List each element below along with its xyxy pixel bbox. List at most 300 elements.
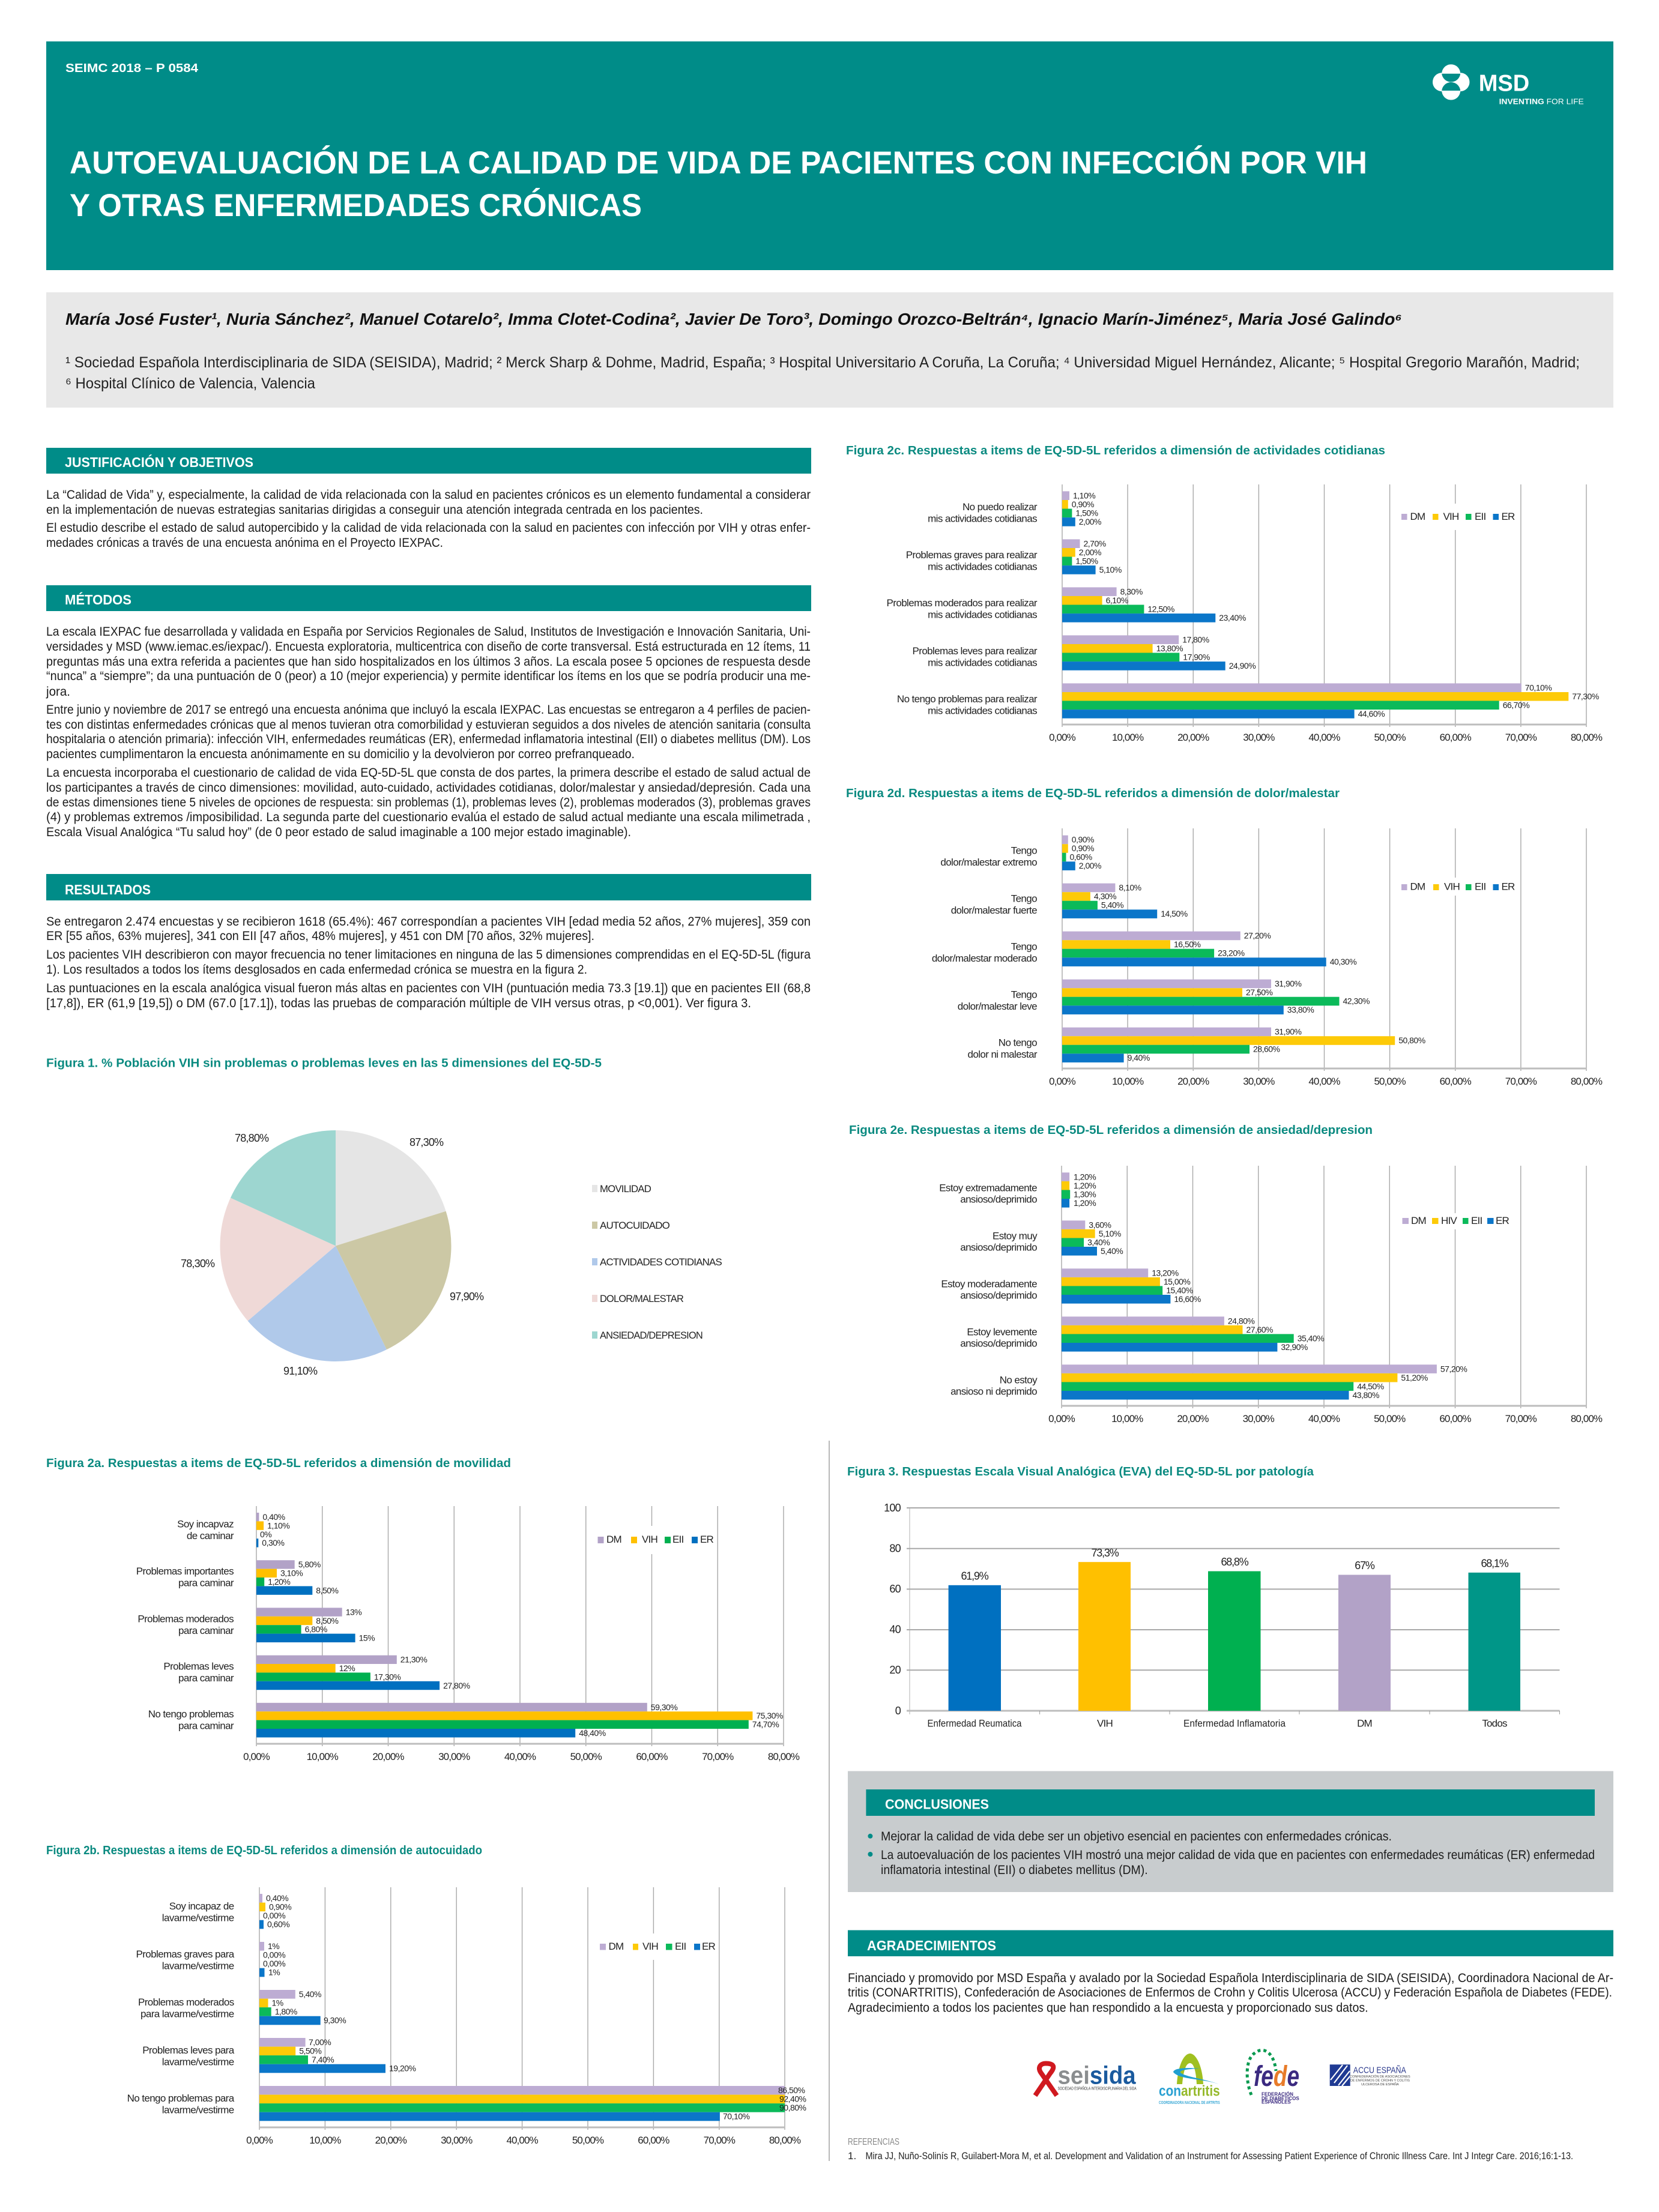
x axis labels: 30,00% (1243, 1413, 1275, 1424)
group: problemas moderados: 1% (271, 1998, 283, 2007)
text block: tritis (CONARTRITIS), Confederación de Asociaciones de Enfermos de Crohn y Colitis Ulcerosa (ACCU) y Federación Española de Diabetes (FEDE). (848, 1986, 1612, 2000)
text block: Entre junio y noviembre de 2017 se entregó una encuesta anónima que incluyó la escala IEXPAC. Las encuestas se entregaron a 4 perfiles de pacien- (46, 703, 811, 717)
group: moderadamente: ansioso/deprimido (960, 1290, 1037, 1301)
icon: seisida logo: seisida (1058, 2061, 1136, 2090)
x axis labels: 30,00% (1243, 1076, 1275, 1087)
text block: tes con distintas enfermedades crónicas que al menos tuvieran otra comorbilidad y estuvieran seguidos a dos niveles de atención sanitaria (consulta (46, 718, 811, 732)
legend: VIH (642, 1534, 657, 1545)
text block: El estudio describe el estado de salud autopercibido y la calidad de vida relacionada con la salud en pacientes con infección por VIH y otras enfer- (46, 521, 811, 535)
group: problemas importantes: para caminar (178, 1578, 234, 1589)
text block: (4) y problemas extremos /imposibilidad. La segunda parte del cuestionario evalúa el estado de salud actual mediante una escala milimetrada , (46, 810, 811, 824)
text block: Las puntuaciones en la escala analógica visual fueron más altas en pacientes con VIH (puntuación media 73.3 [19.1]) que en pacientes EII (68,8 (46, 981, 811, 995)
group: problemas moderados: 6,80% (305, 1624, 327, 1634)
legend: VIH (642, 1941, 658, 1952)
icon: ACCU logo: DE ENFERMOS DE CROHN Y COLITIS (1350, 2079, 1410, 2083)
x axis labels: 10,00% (307, 1751, 339, 1762)
group: problemas leves: 24,90% (1229, 661, 1256, 671)
group: no tengo problemas (148, 1702, 783, 1738)
group: problemas moderados (887, 586, 1246, 622)
x axis labels: 20,00% (375, 2135, 407, 2146)
x axis labels: 40,00% (1308, 1413, 1340, 1424)
x axis labels: 50,00% (1374, 732, 1406, 743)
group: problemas leves (913, 634, 1256, 671)
group: no puedo realizar: mis actividades cotidianas (928, 513, 1037, 524)
group: fuerte: 14,50% (1161, 909, 1188, 918)
group: problemas graves: 1% (268, 1968, 280, 1977)
figure 3: column chart EVA (847, 1465, 1560, 1729)
legend (594, 1526, 715, 1554)
group: no tengo: No tengo (999, 1037, 1037, 1049)
panel: conclusiones (848, 1771, 1613, 1892)
icon: ACCU logo: ACCU ESPAÑA (1353, 2065, 1406, 2075)
group: fuerte: 8,10% (1119, 883, 1141, 893)
group: moderado: 40,30% (1330, 957, 1356, 966)
x axis labels (1049, 732, 1603, 743)
y axis labels: 80 (889, 1543, 901, 1555)
figure title: Figura 2b. Respuestas a items de EQ-5D-5L referidos a dimensión de autocuidado (46, 1844, 482, 1857)
x axis labels: 30,00% (441, 2135, 473, 2146)
text block (46, 915, 811, 1010)
group: no tengo problemas: 77,30% (1572, 692, 1599, 701)
group: extremo (940, 835, 1101, 870)
heading: JUSTIFICACIÓN Y OBJETIVOS (65, 454, 253, 470)
legend: DM (1411, 1215, 1426, 1226)
group: problemas leves: 7,00% (309, 2037, 331, 2047)
main title: AUTOEVALUACIÓN DE LA CALIDAD DE VIDA DE PACIENTES CON INFECCIÓN POR VIH (70, 145, 1367, 181)
main title (70, 145, 1367, 223)
heading: RESULTADOS (65, 882, 151, 897)
text block: [17,8]), ER (61,9 [19,5]) o DM (67.0 [17.1]), todas las pruebas de comparación múltiple de VIH versus otras, p <0,001). Ver figura 3. (46, 996, 751, 1010)
figure 2c: bar chart actividades cotidianas (846, 444, 1603, 743)
x axis labels: 0,00% (246, 2135, 273, 2146)
group: no tengo problemas: No tengo problemas (148, 1708, 234, 1720)
group: problemas leves: mis actividades cotidianas (928, 657, 1037, 668)
group: problemas leves: para caminar (178, 1672, 234, 1684)
x axis labels: 40,00% (1308, 1076, 1340, 1087)
group: problemas moderados: 1,80% (275, 2007, 297, 2016)
legend: ER (1496, 1215, 1509, 1226)
columns (949, 1562, 1520, 1711)
group: problemas moderados: para caminar (178, 1625, 234, 1636)
text block: preguntas más una extra referida a pacientes que han sido hospitalizados en los últimos 3 años. La escala posee 5 opciones de respuesta desde (46, 655, 811, 669)
group: problemas moderados (138, 1989, 346, 2025)
group: no tengo problemas: para caminar (178, 1720, 234, 1731)
group: no tengo problemas: 70,10% (723, 2112, 750, 2121)
group: problemas leves: Problemas leves (163, 1661, 234, 1672)
group: no tengo: dolor ni malestar (968, 1049, 1038, 1060)
group: problemas leves: 13,80% (1156, 643, 1183, 653)
y axis labels: 60 (889, 1583, 901, 1595)
group: muy: 5,10% (1099, 1229, 1121, 1238)
figure title: Figura 2c. Respuestas a items de EQ-5D-5L referidos a dimensión de actividades cotidianas (846, 444, 1385, 457)
x axis labels: 80,00% (769, 2135, 801, 2146)
text block (848, 1971, 1613, 2015)
group: no estoy: 43,80% (1352, 1390, 1379, 1400)
group: problemas leves: 21,30% (400, 1655, 427, 1665)
legend: DM (609, 1941, 623, 1952)
group: problemas leves: 27,80% (443, 1681, 470, 1690)
group: levemente: 35,40% (1298, 1333, 1324, 1343)
group: no estoy: 57,20% (1440, 1364, 1467, 1373)
group: problemas graves: 0,00% (263, 1950, 285, 1959)
group: soy incapaz: 0,90% (269, 1902, 291, 1911)
bullet list: Mejorar la calidad de vida debe ser un objetivo esencial en pacientes con enfermedades crónicas. (881, 1830, 1392, 1843)
group: no tengo problemas: lavarme/vestirme (162, 2105, 234, 2116)
text block: de estas dimensiones tiene 5 niveles de opciones de respuesta: sin problemas (1), problemas leves (2), problemas moderados (3), problemas graves (46, 796, 811, 809)
figure title: Figura 2a. Respuestas a items de EQ-5D-5L referidos a dimensión de movilidad (46, 1457, 511, 1470)
x axis labels: 0,00% (243, 1751, 270, 1762)
legend: VIH (1443, 511, 1458, 522)
category labels (927, 1718, 1507, 1729)
x axis labels: 20,00% (1177, 1413, 1209, 1424)
group: extremo: 2,00% (1079, 861, 1101, 870)
group: muy: 5,40% (1101, 1246, 1123, 1256)
pie value labels (181, 1132, 484, 1377)
affiliations (65, 354, 1580, 392)
group: soy incapaz: 0,60% (267, 1920, 289, 1929)
heading: CONCLUSIONES (885, 1797, 989, 1812)
pie value labels: 78,30% (181, 1258, 215, 1270)
group: no tengo problemas (897, 683, 1599, 719)
group: problemas leves (142, 2037, 416, 2073)
x axis labels: 10,00% (1112, 732, 1144, 743)
icon: MSD logo: INVENTING FOR LIFE (1499, 97, 1584, 106)
legend: ER (1501, 511, 1515, 522)
category labels: Enfermedad Inflamatoria (1183, 1718, 1286, 1729)
legend: ER (1501, 881, 1515, 892)
column value labels: 68,8% (1221, 1556, 1249, 1568)
legend: EII (675, 1941, 686, 1952)
group: fuerte: 4,30% (1094, 891, 1116, 901)
group: soy incapaz: 0,40% (266, 1893, 288, 1903)
pie legend: ANSIEDAD/DEPRESION (600, 1330, 703, 1341)
group: extremo: 0,90% (1072, 843, 1094, 853)
legend: EII (1475, 511, 1485, 522)
legend (1398, 878, 1515, 896)
group: problemas leves (163, 1655, 470, 1690)
x axis labels: 40,00% (506, 2135, 539, 2146)
group: problemas leves: Problemas leves para realizar (913, 645, 1038, 657)
affiliations: ⁶ Hospital Clínico de Valencia, Valencia (65, 375, 315, 392)
x axis labels: 60,00% (1440, 732, 1472, 743)
figure 2b: bar chart autocuidado (46, 1844, 806, 2146)
group: problemas moderados: 13% (346, 1607, 361, 1617)
legend (1398, 504, 1515, 530)
group: problemas leves: 17,90% (1183, 652, 1210, 661)
group: problemas graves: mis actividades cotidianas (928, 561, 1037, 572)
group: moderado: dolor/malestar moderado (932, 953, 1037, 964)
icon: fede logo: FEDERACIÓN (1262, 2092, 1293, 2097)
group: problemas importantes: 3,10% (280, 1569, 303, 1578)
legend: EII (1475, 881, 1485, 892)
group: muy: 3,60% (1089, 1220, 1111, 1229)
icon: conartritis logo: COORDINADORA NACIONAL DE ARTRITIS (1159, 2101, 1220, 2105)
group: soy incapaz: 0,40% (262, 1512, 285, 1522)
pie legend: DOLOR/MALESTAR (600, 1293, 683, 1304)
group: muy: Estoy muy (993, 1230, 1038, 1241)
group: levemente: 24,80% (1228, 1316, 1254, 1325)
x axis labels: 50,00% (572, 2135, 604, 2146)
group: fuerte: dolor/malestar fuerte (951, 905, 1037, 916)
text block: ER [55 años, 63% mujeres], 341 con EII [47 años, 48% mujeres], y 451 con DM [70 años, 32% mujeres]. (46, 929, 594, 943)
group: problemas leves: lavarme/vestirme (162, 2057, 234, 2068)
group: no tengo: 31,90% (1275, 1027, 1302, 1037)
x axis labels: 80,00% (1571, 1076, 1603, 1087)
x axis labels: 60,00% (638, 2135, 669, 2146)
group: no tengo problemas: 92,40% (779, 2094, 806, 2103)
pie legend: MOVILIDAD (600, 1183, 651, 1195)
icon: seisida logo: SOCIEDAD ESPAÑOLA INTERDISCIPLINARIA DEL SIDA (1058, 2086, 1137, 2091)
x axis labels: 60,00% (1440, 1076, 1472, 1087)
icon: seisida logo (1035, 2061, 1137, 2096)
group: no estoy: ansioso ni deprimido (950, 1386, 1037, 1397)
group: problemas leves: Problemas leves para (142, 2045, 235, 2056)
text block: Agradecimiento a todos los pacientes que han respondido a la encuesta y proporcionado sus datos. (848, 2001, 1368, 2015)
legend: VIH (1444, 881, 1460, 892)
icon: fede logo: ESPAÑOLES (1262, 2100, 1291, 2105)
group: no tengo problemas: 66,70% (1503, 700, 1529, 710)
group: problemas leves: 17,30% (374, 1672, 400, 1681)
figure title: Figura 3. Respuestas Escala Visual Analógica (EVA) del EQ-5D-5L por patología (847, 1465, 1314, 1478)
group: fuerte (951, 883, 1188, 918)
group: extremo: dolor/malestar extremo (940, 857, 1037, 868)
group: no estoy: No estoy (1000, 1374, 1038, 1385)
figure 2d: bar chart dolor/malestar (846, 787, 1603, 1087)
group: moderado: 23,20% (1218, 948, 1245, 958)
icon: fede logo (1247, 2050, 1299, 2105)
group: problemas moderados: 8,30% (1120, 586, 1143, 596)
references: REFERENCIAS (848, 2137, 899, 2147)
group: problemas leves: 12% (339, 1663, 355, 1673)
main title: Y OTRAS ENFERMEDADES CRÓNICAS (70, 187, 642, 223)
group: problemas moderados: 9,30% (324, 2016, 346, 2025)
group: problemas moderados: 6,10% (1106, 595, 1128, 605)
x axis labels: 10,00% (1111, 1413, 1143, 1424)
category labels: DM (1357, 1718, 1372, 1729)
group: soy incapaz: Soy incapaz de (169, 1900, 234, 1912)
group: moderadamente: Estoy moderadamente (941, 1278, 1037, 1289)
group: no estoy (950, 1364, 1467, 1400)
group: no tengo problemas: 70,10% (1525, 683, 1552, 692)
pie value labels: 87,30% (409, 1136, 444, 1148)
group: leve: dolor/malestar leve (958, 1001, 1037, 1012)
group: extremo: 0,60% (1070, 852, 1092, 862)
text block: “nunca” a “siempre”; da una puntuación de 0 (peor) a 10 (mejor experiencia) y permite identificar los ítems en los que se podría producir una me- (46, 669, 811, 683)
group: moderadamente: 13,20% (1152, 1268, 1179, 1277)
x axis labels: 10,00% (1112, 1076, 1144, 1087)
x axis labels: 70,00% (1505, 732, 1537, 743)
x axis labels: 30,00% (438, 1751, 470, 1762)
legend: EII (1471, 1215, 1482, 1226)
y axis labels: 20 (889, 1664, 901, 1676)
icon: MSD logo: MSD (1479, 71, 1529, 97)
group: problemas moderados: Problemas moderados (137, 1613, 234, 1624)
group: extremadamente (939, 1172, 1096, 1208)
text block (46, 488, 811, 550)
group: moderado: Tengo (1011, 941, 1037, 953)
x axis labels: 40,00% (1308, 732, 1340, 743)
group: fuerte: Tengo (1011, 893, 1037, 905)
icon: ACCU logo (1330, 2064, 1410, 2087)
x axis labels: 10,00% (309, 2135, 341, 2146)
x axis labels: 70,00% (702, 1751, 734, 1762)
text block: La “Calidad de Vida” y, especialmente, la calidad de vida relacionada con la salud en pacientes crónicos es un elemento fundamental a considerar (46, 488, 811, 502)
group: problemas graves (906, 538, 1122, 574)
text block: La encuesta incorporaba el cuestionario de calidad de vida EQ-5D-5L que consta de dos partes, la primera describe el estado de salud actual de (46, 766, 811, 780)
group: moderadamente: 16,60% (1174, 1294, 1201, 1304)
icon: ACCU logo: CONFEDERACIÓN DE ASOCIACIONES (1350, 2075, 1410, 2079)
y axis labels (884, 1502, 901, 1717)
x axis labels: 50,00% (1374, 1413, 1406, 1424)
group: no tengo: 50,80% (1398, 1035, 1425, 1045)
pie value labels: 91,10% (283, 1365, 318, 1377)
category labels: VIH (1097, 1718, 1113, 1729)
group: moderado: 27,20% (1244, 931, 1271, 941)
group: problemas moderados: Problemas moderados para realizar (887, 597, 1038, 609)
group: soy incapaz: Soy incapvaz (177, 1519, 234, 1529)
text block: los participantes a través de cinco dimensiones: movilidad, auto-cuidado, actividades cotidianas, dolor/malestar y ansiedad/depresión. Cada una (46, 781, 811, 795)
group: extremadamente: 1,20% (1074, 1181, 1096, 1190)
x axis labels (243, 1751, 800, 1762)
group: no tengo: 28,60% (1253, 1044, 1280, 1054)
x axis labels: 80,00% (768, 1751, 800, 1762)
group: problemas leves: 5,50% (299, 2046, 321, 2055)
column value labels: 73,3% (1091, 1547, 1119, 1559)
x axis labels: 0,00% (1049, 1076, 1076, 1087)
group: fuerte: 5,40% (1101, 900, 1123, 910)
x axis labels (246, 2135, 801, 2146)
legend: ER (700, 1534, 714, 1545)
group: problemas moderados: 15% (359, 1633, 375, 1643)
group: soy incapaz: 1,10% (267, 1520, 289, 1530)
references (848, 2137, 1573, 2162)
legend: ER (702, 1941, 716, 1952)
group: levemente: Estoy levemente (967, 1326, 1037, 1337)
legend: DM (1410, 881, 1425, 892)
panel: justificación y objetivos (46, 448, 811, 550)
text block: pacientes cumplimentaron la encuesta anónimamente en su domicilio y la devolvieron por correo prefranqueado. (46, 747, 635, 761)
group: problemas moderados: Problemas moderados (138, 1997, 234, 2008)
panel: métodos (46, 585, 811, 839)
y axis labels: 100 (884, 1502, 901, 1514)
x axis labels: 0,00% (1049, 732, 1076, 743)
legend: DM (606, 1534, 621, 1545)
text block: versidades y MSD (www.iemac.es/iexpac/). Encuesta exploratoria, multicentrica con diseño de corte transversal. Está estructurada en 12 ítems, 11 (46, 640, 811, 654)
group: soy incapaz: lavarme/vestirme (162, 1912, 234, 1924)
group: problemas graves: 2,70% (1083, 538, 1106, 548)
group: extremo: Tengo (1011, 845, 1037, 857)
text block: Se entregaron 2.474 encuestas y se recibieron 1618 (65.4%): 467 correspondían a pacientes VIH [edad media 52 años, 27% mujeres], 359 con (46, 915, 811, 929)
group: problemas moderados: para lavarme/vestirme (141, 2009, 234, 2020)
text block: Financiado y promovido por MSD España y avalado por la Sociedad Española Interdisciplinaria de SIDA (SEISIDA), Coordinadora Nacional de Ar- (848, 1971, 1613, 1985)
y axis labels: 40 (889, 1623, 901, 1635)
group: levemente: 32,90% (1281, 1342, 1308, 1352)
group: no tengo problemas: 75,30% (756, 1711, 783, 1720)
group: leve: 31,90% (1275, 979, 1302, 989)
group: no tengo problemas: 48,40% (579, 1728, 606, 1738)
group: problemas moderados (137, 1607, 375, 1643)
group: problemas importantes: 1,20% (268, 1577, 290, 1587)
panel: resultados (46, 874, 811, 1010)
group: no tengo (968, 1027, 1425, 1062)
group: problemas moderados: 23,40% (1219, 613, 1246, 622)
group: leve: 27,50% (1246, 987, 1273, 997)
column value labels: 67% (1355, 1560, 1375, 1572)
legend: EII (672, 1534, 683, 1545)
x axis labels (1048, 1413, 1603, 1424)
x axis labels: 70,00% (704, 2135, 736, 2146)
group: problemas moderados: 12,50% (1147, 604, 1174, 613)
legend (596, 1933, 716, 1960)
group: moderadamente: 15,00% (1164, 1277, 1190, 1286)
group: levemente (960, 1316, 1324, 1352)
authors: María José Fuster¹, Nuria Sánchez², Manuel Cotarelo², Imma Clotet-Codina², Javier De Toro³, Domingo Orozco-Beltrán⁴, Ignacio Marín-Jiménez⁵, Maria José Galindo⁶ (65, 310, 1402, 328)
group: no tengo problemas: No tengo problemas para realizar (897, 693, 1038, 705)
column value labels (961, 1547, 1509, 1582)
affiliations: ¹ Sociedad Española Interdisciplinaria de SIDA (SEISIDA), Madrid; ² Merck Sharp & Dohme, Madrid, España; ³ Hospital Universitario A Coruña, La Coruña; ⁴ Universidad Miguel Hernández, Alicante; ⁵ Hospital Gregorio Marañón, Madrid; (65, 354, 1580, 371)
x axis labels: 80,00% (1571, 1413, 1603, 1424)
group: no estoy: 51,20% (1401, 1373, 1428, 1382)
group: problemas importantes: 8,50% (316, 1585, 339, 1595)
group: problemas graves: Problemas graves para realizar (906, 549, 1038, 561)
group: soy incapaz: 0,00% (263, 1911, 285, 1920)
poster code: SEIMC 2018 – P 0584 (65, 62, 199, 75)
x axis labels: 50,00% (1374, 1076, 1406, 1087)
panel: agradecimientos (848, 1930, 1613, 2015)
group: problemas leves: 7,40% (312, 2055, 334, 2064)
group: moderadamente: 15,40% (1166, 1285, 1193, 1295)
group: no tengo problemas: No tengo problemas para (127, 2093, 235, 2104)
group: problemas moderados: 8,50% (316, 1616, 339, 1626)
x axis labels: 60,00% (1439, 1413, 1471, 1424)
group: muy: ansioso/deprimido (960, 1242, 1037, 1253)
legend (1398, 1213, 1510, 1229)
group: problemas moderados: 5,40% (299, 1989, 321, 1999)
legend: HIV (1441, 1215, 1457, 1226)
group: problemas leves: 17,80% (1182, 634, 1209, 644)
group: problemas graves: 1% (268, 1941, 279, 1951)
group: no tengo problemas: 86,50% (778, 2085, 805, 2095)
group: problemas graves: 0,00% (263, 1959, 285, 1968)
heading: MÉTODOS (65, 591, 131, 607)
x axis labels: 20,00% (1177, 1076, 1209, 1087)
group: problemas leves: 19,20% (389, 2064, 416, 2073)
group: leve (958, 979, 1370, 1014)
pie value labels: 97,90% (450, 1291, 484, 1303)
group: soy incapaz (177, 1512, 289, 1547)
panel: authors and affiliations (46, 292, 1613, 408)
group: problemas importantes: 5,80% (298, 1560, 321, 1569)
pie legend (592, 1183, 722, 1341)
bullet list (868, 1830, 1595, 1877)
text block: en la implementación de nuevas estrategias sanitarias dirigidas a conseguir una atención integrada centrada en los pacientes. (46, 503, 703, 517)
group: no tengo problemas: 90,80% (779, 2103, 806, 2112)
figure title: Figura 2e. Respuestas a items de EQ-5D-5L referidos a dimensión de ansiedad/depresion (849, 1124, 1373, 1137)
icon: fede logo: DE DIABÉTICOS (1262, 2096, 1299, 2101)
group: muy (960, 1220, 1123, 1256)
group: soy incapaz: 0,30% (262, 1538, 285, 1547)
group: soy incapaz: 0% (260, 1529, 271, 1539)
group: no puedo realizar: 1,10% (1073, 490, 1095, 500)
icon: conartritis logo (1159, 2054, 1220, 2105)
group: extremadamente: 1,30% (1074, 1189, 1096, 1199)
pie legend: AUTOCUIDADO (600, 1220, 670, 1231)
figure 1: pie chart (46, 1056, 722, 1377)
x axis labels: 70,00% (1505, 1076, 1537, 1087)
pie legend: ACTIVIDADES COTIDIANAS (600, 1256, 722, 1268)
text block: hospitalaria o atención primaria): infección VIH, enfermedades reumáticas (ER), enfermedad inflamatoria intestinal (EII) o diabetes mellitus (DM). Los (46, 732, 811, 746)
y axis labels: 0 (895, 1705, 901, 1717)
